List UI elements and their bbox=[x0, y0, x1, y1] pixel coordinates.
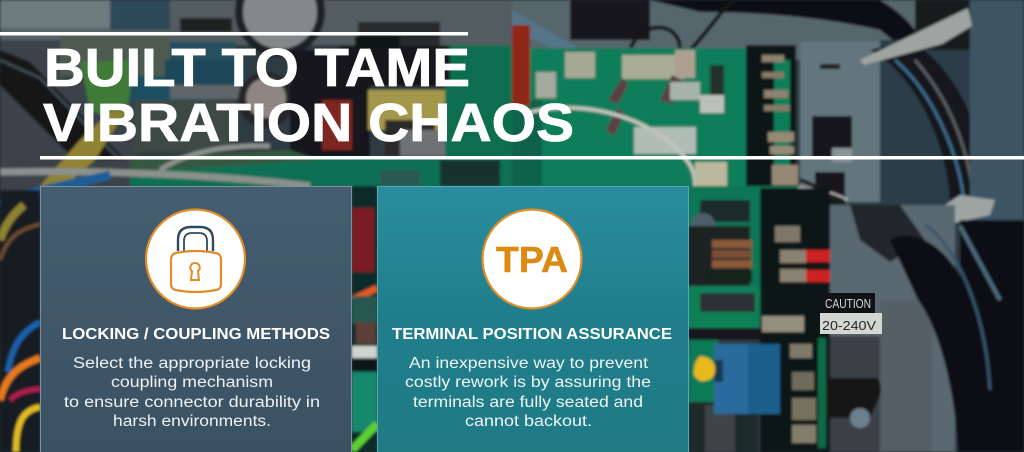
panel body text: cannot backout. bbox=[465, 413, 592, 430]
panel: terminal position assurance bbox=[378, 186, 688, 452]
title: VIBRATION CHAOS bbox=[43, 93, 574, 153]
caution label in photo: 20-240V bbox=[822, 318, 876, 333]
caution label in photo: CAUTION bbox=[825, 296, 871, 311]
panel body text: coupling mechanism bbox=[111, 374, 273, 391]
icon: padlock in circle bbox=[146, 210, 245, 308]
icon: TPA badge bbox=[482, 210, 582, 308]
title: BUILT TO TAME bbox=[44, 38, 470, 98]
panel body text: An inexpensive way to prevent bbox=[409, 355, 649, 372]
panel body text: harsh environments. bbox=[113, 413, 271, 430]
bottom title rule bbox=[40, 156, 1024, 160]
panel heading: LOCKING / COUPLING METHODS bbox=[62, 326, 330, 343]
panel body text: Select the appropriate locking bbox=[73, 355, 311, 372]
icon: TPA badge: TPA bbox=[496, 239, 568, 280]
panel body text: costly rework is by assuring the bbox=[405, 374, 651, 391]
top title rule bbox=[0, 32, 468, 36]
panel body text bbox=[64, 355, 320, 430]
panel body text: to ensure connector durability in bbox=[64, 394, 320, 411]
caution label in photo bbox=[820, 293, 882, 334]
panel body text: terminals are fully seated and bbox=[413, 394, 643, 411]
title bbox=[43, 38, 574, 153]
panel body text bbox=[405, 355, 651, 430]
panel heading: TERMINAL POSITION ASSURANCE bbox=[392, 326, 672, 343]
panel: locking and coupling methods bbox=[40, 186, 352, 452]
